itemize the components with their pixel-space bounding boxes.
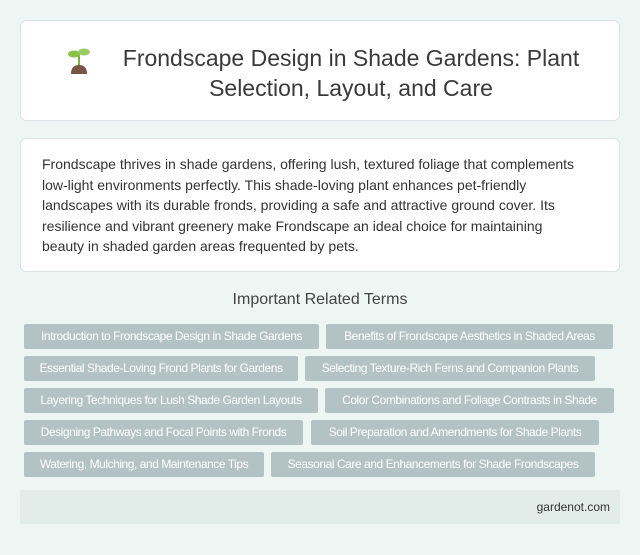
tags: Selecting Texture-Rich Ferns and Companion Plants [322,361,578,375]
tags: Introduction to Frondscape Design in Shade Gardens [41,329,302,343]
tags: Color Combinations and Foliage Contrasts in Shade [342,393,597,407]
header card [20,20,620,121]
footer credit: gardenot.com [537,500,610,514]
footer [20,490,620,524]
heading: related terms: Important Related Terms [233,291,407,308]
description text: landscapes with its durable fronds, providing a safe and attractive ground cover. Its [42,197,555,213]
tags: Watering, Mulching, and Maintenance Tips [40,457,248,471]
tags: Soil Preparation and Amendments for Shade Plants [329,425,581,439]
tags: Benefits of Frondscape Aesthetics in Shaded Areas [344,329,595,343]
description text: Frondscape thrives in shade gardens, offering lush, textured foliage that complements [42,156,574,172]
tags: Seasonal Care and Enhancements for Shade Frondscapes [288,457,578,471]
description text [42,156,574,254]
description card [20,138,620,272]
title: Frondscape Design in Shade Gardens: Plant Selection, Layout, and Care [123,45,579,101]
description text: resilience and vibrant greenery make Frondscape an ideal choice for maintaining [42,218,542,234]
description text: beauty in shaded garden areas frequented by pets. [42,238,359,254]
description text: low-light environments perfectly. This shade-loving plant enhances pet-friendly [42,176,526,192]
tags: Layering Techniques for Lush Shade Garden Layouts [40,393,302,407]
tags: Designing Pathways and Focal Points with Fronds [41,425,286,439]
tags: Essential Shade-Loving Frond Plants for Gardens [40,361,282,375]
icon: seedling [68,48,90,74]
